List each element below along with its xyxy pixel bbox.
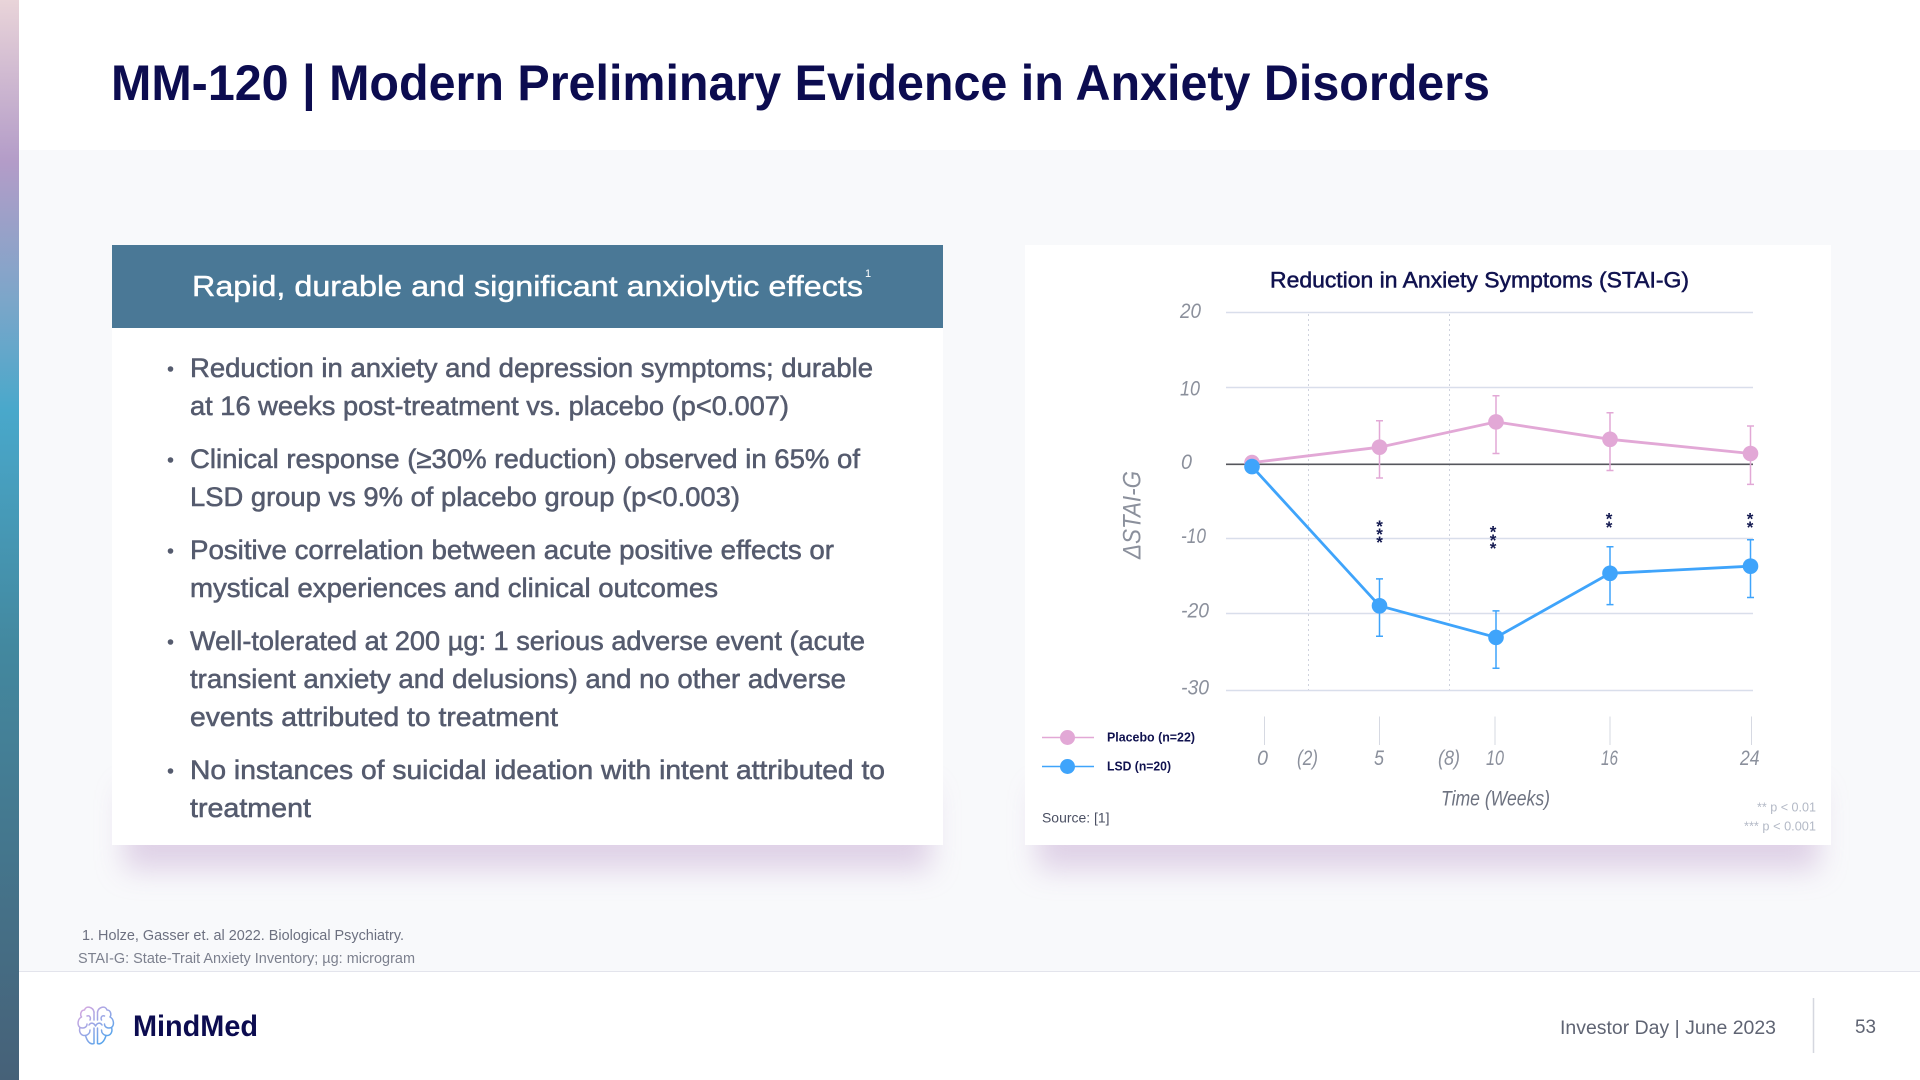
page number: 53 — [1855, 1017, 1876, 1038]
bullet 1: at 16 weeks post-treatment vs. placebo (p<0.007) — [190, 391, 789, 421]
bullet 3: mystical experiences and clinical outcomes — [190, 573, 718, 603]
bullet 4 — [168, 626, 865, 732]
panel header — [112, 245, 943, 328]
x axis labels: (2) — [1297, 747, 1318, 770]
bullet 3 — [168, 535, 834, 603]
legend: placebo: Placebo (n=22) — [1107, 730, 1195, 744]
x axis labels: 10 — [1486, 747, 1504, 770]
legend: LSD — [1042, 758, 1171, 774]
p value key: *** p < 0.001 — [1744, 818, 1816, 834]
significance markers: * — [1490, 539, 1497, 558]
icon: brain logo — [78, 1007, 113, 1044]
panel header: Rapid, durable and significant anxiolytic effects — [192, 271, 863, 303]
y axis labels: -20 — [1181, 600, 1209, 622]
bullet 5: No instances of suicidal ideation with intent attributed to — [190, 755, 885, 785]
bullet 1: Reduction in anxiety and depression symptoms; durable — [190, 353, 873, 383]
x axis labels: 16 — [1601, 747, 1618, 770]
panel header: 1 — [865, 268, 871, 280]
panel: chart — [1025, 245, 1831, 870]
bullet list — [168, 353, 885, 823]
significance markers — [1376, 510, 1754, 558]
x axis labels — [1257, 747, 1760, 770]
significance markers: * — [1376, 533, 1383, 552]
significance markers: * — [1376, 517, 1383, 536]
x axis ticks — [1264, 716, 1752, 745]
bullet 5 — [168, 755, 885, 823]
significance markers: * — [1747, 510, 1754, 528]
chart title: Reduction in Anxiety Symptoms (STAI-G) — [1270, 268, 1689, 292]
footnotes: 1. Holze, Gasser et. al 2022. Biological Psychiatry. — [82, 928, 404, 944]
y axis title: ΔSTAI-G — [1118, 471, 1146, 560]
content background band — [19, 150, 1920, 971]
x axis title: Time (Weeks) — [1441, 788, 1550, 810]
bullet 2: Clinical response (≥30% reduction) observed in 65% of — [190, 444, 860, 474]
left gradient bar — [0, 0, 19, 1080]
legend — [1042, 730, 1195, 774]
panel: anxiolytic effects — [112, 245, 943, 870]
bullet 5: treatment — [190, 793, 312, 823]
footnotes: STAI-G: State-Trait Anxiety Inventory; µg: microgram — [78, 951, 415, 967]
x axis labels: 0 — [1257, 747, 1268, 770]
y axis labels: 10 — [1180, 378, 1200, 400]
y axis labels: -30 — [1181, 676, 1209, 700]
footer vertical divider — [1812, 998, 1814, 1053]
significance markers: * — [1606, 518, 1613, 537]
line chart — [1118, 300, 1760, 810]
panel shadow — [124, 790, 931, 870]
bullet 2: LSD group vs 9% of placebo group (p<0.003) — [190, 482, 740, 512]
series: LSD — [1244, 459, 1758, 668]
bullet 2 — [168, 444, 860, 512]
x axis labels: 24 — [1739, 747, 1760, 770]
significance markers: * — [1490, 531, 1497, 550]
significance markers: * — [1747, 518, 1754, 537]
y axis labels: -10 — [1181, 525, 1206, 548]
footer divider — [19, 970, 1920, 972]
y axis labels: 20 — [1179, 300, 1201, 323]
legend: LSD: LSD (n=20) — [1107, 758, 1171, 774]
bullet 4: Well-tolerated at 200 µg: 1 serious adverse event (acute — [190, 626, 865, 656]
bullet 1 — [168, 353, 873, 421]
significance markers: * — [1376, 525, 1383, 544]
logo wordmark: MindMed — [133, 1010, 258, 1043]
bullet 4: events attributed to treatment — [190, 702, 559, 732]
x axis labels: (8) — [1438, 747, 1460, 770]
x axis labels: 5 — [1374, 747, 1384, 770]
panel body — [112, 245, 943, 845]
footer event label: Investor Day | June 2023 — [1560, 1018, 1776, 1039]
source note: Source: [1] — [1042, 810, 1110, 826]
significance markers: * — [1606, 510, 1613, 528]
footnotes — [78, 928, 415, 967]
p value key: ** p < 0.01 — [1757, 800, 1816, 814]
chart panel shadow — [1037, 790, 1819, 870]
bullet 3: Positive correlation between acute positive effects or — [190, 535, 834, 565]
legend: placebo — [1042, 730, 1195, 745]
y axis labels — [1179, 300, 1209, 700]
bullet 4: transient anxiety and delusions) and no other adverse — [190, 664, 846, 694]
title: MM-120 | Modern Preliminary Evidence in Anxiety Disorders — [111, 55, 1490, 112]
series: placebo — [1244, 396, 1758, 484]
p value key — [1744, 800, 1816, 834]
y axis labels: 0 — [1181, 451, 1192, 474]
chart panel body — [1025, 245, 1831, 845]
significance markers: * — [1490, 522, 1497, 542]
